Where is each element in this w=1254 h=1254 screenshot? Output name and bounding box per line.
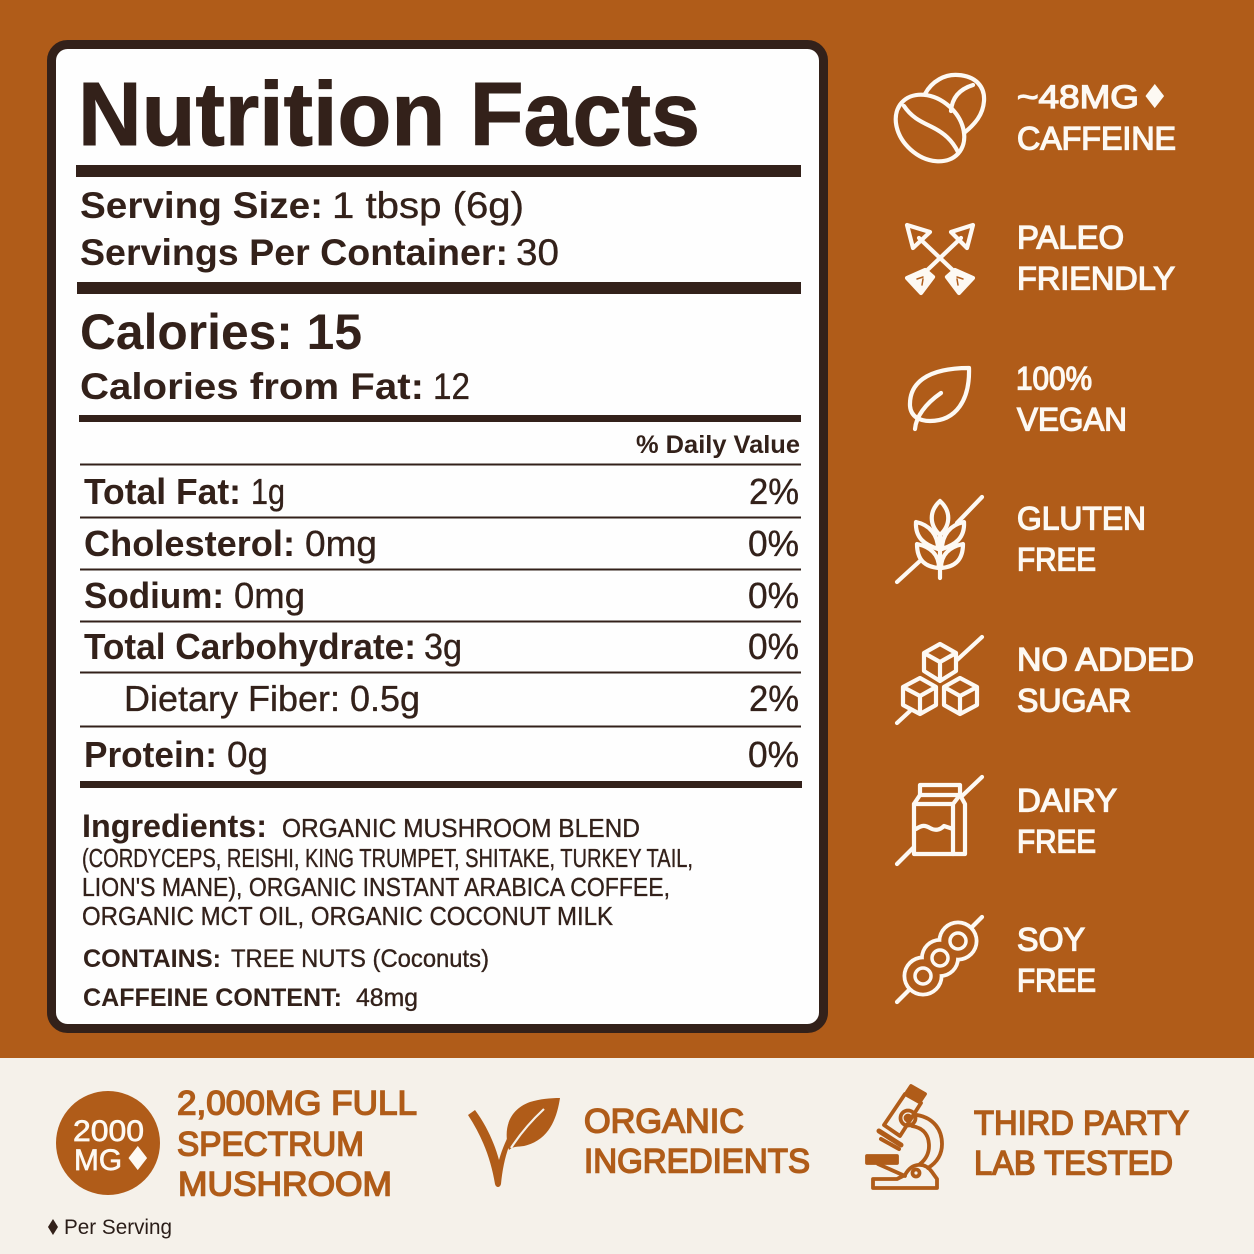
label: caffeine (1017, 77, 1176, 156)
label: vegan: 100% (1016, 360, 1092, 396)
servings per container: 30 (516, 232, 559, 273)
row: protein: 0g (227, 734, 268, 775)
row: total carbohydrate: Total Carbohydrate: (84, 626, 416, 667)
row: sodium (84, 575, 799, 616)
row: sodium: 0mg (234, 575, 305, 616)
row: dietary fiber: Dietary Fiber: 0.5g (124, 678, 420, 719)
badge: 2000 mg: ♦ (123, 1139, 153, 1178)
panel: bottom band (0, 1058, 1254, 1254)
row: total fat (84, 471, 799, 512)
icon: organic check leaf (468, 1098, 560, 1187)
contains: CONTAINS: (83, 945, 221, 973)
note: per serving: Per Serving (64, 1216, 172, 1239)
row: total fat: Total Fat: (84, 471, 241, 512)
label: dairy free: FREE (1017, 824, 1096, 860)
contains: TREE NUTS (Coconuts) (231, 945, 489, 973)
panel: nutrition facts (52, 44, 824, 1028)
label: gluten free: FREE (1017, 542, 1096, 578)
label: caffeine: CAFFEINE (1017, 120, 1176, 156)
ingredients: ORGANIC MUSHROOM BLEND (282, 813, 640, 843)
label: vegan (1016, 360, 1127, 438)
icon: no added sugar cubes (897, 637, 982, 723)
label: soy free (1017, 922, 1096, 998)
badge: 2000 mg (56, 1091, 160, 1195)
badge: 2000 mg: MG (74, 1144, 122, 1177)
row: total fat: 2% (749, 471, 799, 512)
label: no added sugar: NO ADDED (1017, 642, 1194, 678)
ingredients: Ingredients: (82, 808, 267, 844)
row: total carbohydrate: 0% (748, 626, 799, 667)
ingredients: LION'S MANE), ORGANIC INSTANT ARABICA COFFEE, (82, 872, 670, 902)
label: full spectrum mushroom: 2,000MG FULL (177, 1084, 417, 1122)
badge: 2000 mg: 2000 (73, 1115, 144, 1148)
row: total carbohydrate: 3g (424, 626, 462, 667)
row: sodium: Sodium: (84, 575, 224, 616)
label: third party lab tested: THIRD PARTY (974, 1104, 1189, 1142)
caffeine content: CAFFEINE CONTENT: (83, 984, 342, 1012)
label: gluten free: GLUTEN (1017, 500, 1146, 536)
label: no added sugar (1017, 642, 1194, 718)
label: caffeine: ~48MG (1017, 79, 1139, 115)
row: cholesterol: 0mg (305, 523, 377, 564)
label: paleo: PALEO (1017, 220, 1124, 256)
label: no added sugar: SUGAR (1017, 682, 1131, 718)
icon: dairy free carton (897, 777, 982, 864)
icon: coffee beans (882, 75, 984, 175)
note: per serving: ♦ (45, 1214, 61, 1240)
label: dairy free: DAIRY (1017, 782, 1117, 818)
label: paleo: FRIENDLY (1017, 260, 1175, 296)
label: third party lab tested: LAB TESTED (974, 1144, 1173, 1182)
servings per container: Servings Per Container: (80, 232, 508, 273)
contains (83, 945, 489, 973)
label: soy free: FREE (1017, 962, 1096, 998)
ingredients (82, 808, 693, 931)
row: dietary fiber: 2% (749, 678, 799, 719)
icon: microscope (867, 1086, 942, 1188)
ingredients: (CORDYCEPS, REISHI, KING TRUMPET, SHITAKE, TURKEY TAIL, (82, 843, 693, 873)
row: protein: 0% (748, 734, 799, 775)
row: total fat: 1g (251, 471, 285, 512)
serving size: 1 tbsp (6g) (332, 185, 524, 226)
serving size: Serving Size: (80, 185, 323, 226)
row: dietary fiber (124, 678, 799, 719)
label: third party lab tested (974, 1104, 1189, 1182)
label: full spectrum mushroom: SPECTRUM (177, 1126, 364, 1164)
icon: soy free pod (897, 917, 982, 1002)
label: caffeine: ♦ (1140, 77, 1170, 116)
calories from fat: Calories from Fat: (80, 366, 424, 407)
label: vegan: VEGAN (1017, 402, 1127, 438)
label: organic ingredients: INGREDIENTS (584, 1142, 810, 1180)
label: full spectrum mushroom: MUSHROOM (178, 1166, 392, 1204)
label: organic ingredients (584, 1102, 810, 1180)
serving size (80, 185, 524, 226)
caffeine content: 48mg (356, 984, 418, 1012)
label: dairy free (1017, 782, 1117, 860)
row: cholesterol: Cholesterol: (84, 523, 295, 564)
label: paleo (1017, 220, 1175, 296)
daily value header: % Daily Value (636, 431, 800, 459)
row: cholesterol: 0% (748, 523, 799, 564)
calories: Calories: 15 (80, 304, 362, 360)
label: soy free: SOY (1017, 922, 1085, 958)
row: protein: Protein: (84, 734, 217, 775)
calories from fat: 12 (433, 366, 470, 407)
row: protein (84, 734, 799, 775)
label: organic ingredients: ORGANIC (584, 1102, 744, 1140)
label: gluten free (1017, 500, 1146, 578)
row: sodium: 0% (748, 575, 799, 616)
icon: crossed arrows (907, 225, 973, 293)
label: full spectrum mushroom (177, 1084, 417, 1204)
icon: gluten free wheat (897, 497, 982, 582)
icon: leaf (910, 368, 969, 429)
row: total carbohydrate (84, 626, 799, 667)
row: cholesterol (84, 523, 799, 564)
ingredients: ORGANIC MCT OIL, ORGANIC COCONUT MILK (82, 901, 614, 931)
title: Nutrition Facts (78, 65, 700, 165)
